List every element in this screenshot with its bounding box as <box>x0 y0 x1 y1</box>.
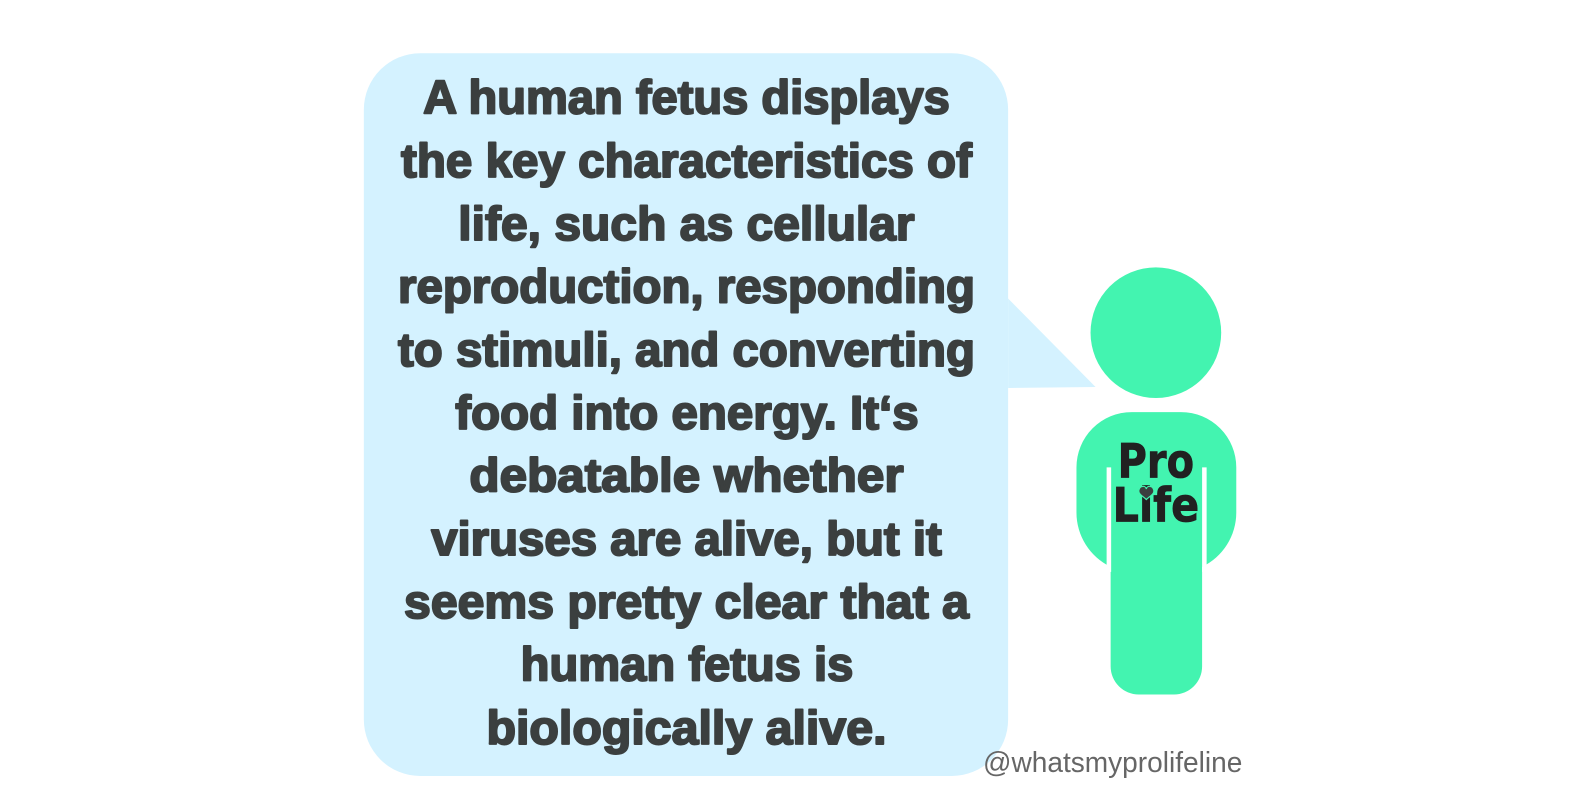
speech text: reproduction, responding <box>398 261 975 314</box>
shirt text: Pro Life: Life <box>1113 479 1199 534</box>
speech text: human fetus is <box>521 638 853 691</box>
shirt text: Pro Life <box>1113 434 1199 534</box>
speech text: biologically alive. <box>486 702 887 755</box>
speech text: seems pretty clear that a <box>404 576 970 629</box>
speech text: viruses are alive, but it <box>431 513 942 566</box>
speech text <box>398 72 975 755</box>
speech bubble <box>364 53 1096 776</box>
speech text: life, such as cellular <box>458 198 915 251</box>
speech text: the key characteristics of <box>401 135 972 188</box>
speech text: debatable whether <box>469 449 904 502</box>
handle credit: @whatsmyprolifeline <box>983 747 1242 779</box>
speech text: to stimuli, and converting <box>398 324 975 377</box>
head <box>1091 267 1221 398</box>
icon: heart <box>1139 486 1154 500</box>
person figure <box>1076 267 1236 695</box>
speech text: A human fetus displays <box>423 72 950 125</box>
speech text: food into energy. It‘s <box>455 387 919 440</box>
body <box>1076 412 1236 695</box>
shirt text: Pro Life: Pro <box>1118 434 1194 489</box>
